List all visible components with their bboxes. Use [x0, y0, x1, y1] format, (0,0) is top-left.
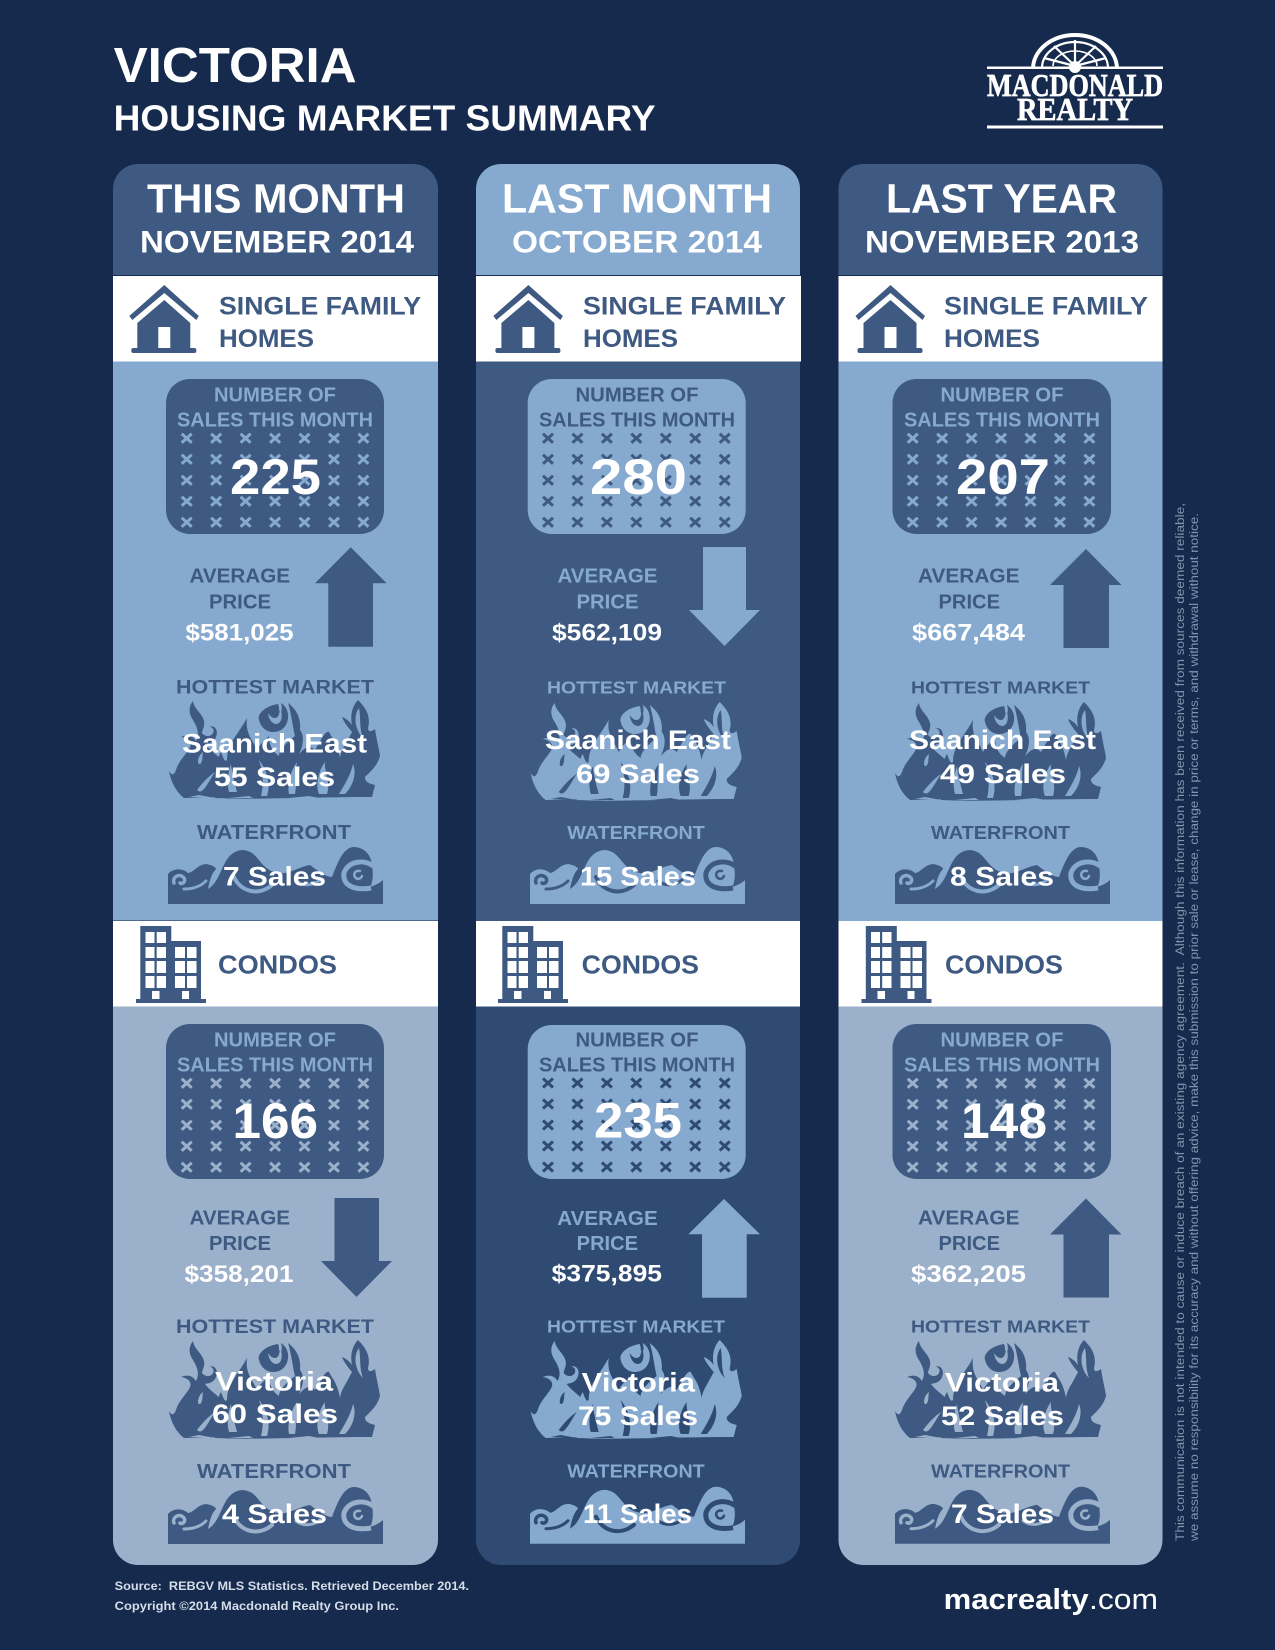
- sales box: SALES THIS MONTH: [177, 410, 373, 432]
- average price: PRICE: [209, 1233, 271, 1255]
- section: homes: [838, 362, 1162, 921]
- sales box: NUMBER OF: [940, 385, 1064, 407]
- section: homes: [476, 362, 800, 921]
- average price: AVERAGE: [918, 566, 1020, 588]
- average price: [911, 1208, 1026, 1288]
- hottest market: [169, 1316, 380, 1439]
- banner: condos: [838, 921, 1162, 1006]
- sales box: 280: [590, 449, 687, 505]
- waterfront: [895, 823, 1110, 904]
- website: macrealty: [944, 1584, 1089, 1616]
- sales box: NUMBER OF: [576, 1030, 698, 1052]
- hottest market: 75 Sales: [578, 1401, 698, 1431]
- waterfront: [530, 1462, 745, 1544]
- average price: [552, 1208, 662, 1288]
- waterfront: 4 Sales: [222, 1499, 327, 1529]
- sales box: SALES THIS MONTH: [539, 1055, 735, 1077]
- average price: PRICE: [938, 1233, 1000, 1255]
- banner: single family homes: HOMES: [944, 325, 1040, 353]
- banner: single family homes: SINGLE FAMILY: [583, 292, 786, 320]
- disclaimer: we assume no responsibility for its accuracy and without offering advice, make this submission to prior sale or lease, change in price or terms, and withdrawal without notice.: [1189, 513, 1201, 1542]
- average price: PRICE: [209, 591, 271, 613]
- hottest market: Saanich East: [182, 728, 367, 758]
- arrow down: [689, 547, 760, 646]
- sales box: 225: [230, 449, 321, 505]
- header: this month: NOVEMBER 2014: [140, 224, 414, 260]
- header: last year: LAST YEAR: [886, 176, 1117, 222]
- sales box: [166, 379, 384, 534]
- sales box: 235: [594, 1093, 682, 1149]
- sales box: NUMBER OF: [940, 1030, 1064, 1052]
- logo: Macdonald Realty: [987, 35, 1163, 128]
- sales box: 166: [232, 1093, 318, 1149]
- average price: $375,895: [552, 1261, 662, 1288]
- hottest market: HOTTEST MARKET: [911, 678, 1090, 698]
- banner: single family homes: [476, 276, 801, 362]
- hottest market: [531, 1316, 742, 1439]
- header: this month: [113, 164, 438, 275]
- title: [114, 39, 656, 138]
- header: last month: [476, 164, 800, 275]
- waterfront: 7 Sales: [223, 862, 326, 892]
- banner: condos: CONDOS: [582, 951, 699, 979]
- logo: Macdonald Realty: REALTY: [1017, 91, 1133, 127]
- header: this month: THIS MONTH: [147, 176, 405, 222]
- banner: single family homes: SINGLE FAMILY: [944, 292, 1148, 320]
- hottest market: 55 Sales: [214, 762, 335, 792]
- hottest market: HOTTEST MARKET: [911, 1316, 1090, 1336]
- average price: AVERAGE: [190, 566, 290, 588]
- arrow up: [1050, 549, 1122, 648]
- hottest market: HOTTEST MARKET: [176, 1316, 374, 1338]
- sales box: SALES THIS MONTH: [904, 410, 1100, 432]
- average price: AVERAGE: [918, 1208, 1020, 1230]
- header: last year: NOVEMBER 2013: [865, 224, 1139, 260]
- banner: condos: [476, 921, 800, 1006]
- hottest market: [895, 1316, 1106, 1439]
- disclaimer: [1175, 503, 1201, 1542]
- average price: [552, 566, 662, 647]
- sales box: [892, 379, 1111, 534]
- sales box: SALES THIS MONTH: [539, 410, 735, 432]
- section: condos: [113, 1006, 438, 1565]
- waterfront: WATERFRONT: [567, 823, 705, 843]
- sales box: NUMBER OF: [214, 1030, 336, 1052]
- banner: condos: CONDOS: [945, 951, 1063, 979]
- waterfront: 15 Sales: [580, 862, 696, 892]
- sales box: [528, 379, 746, 534]
- arrow down: [321, 1198, 392, 1297]
- header: last month: OCTOBER 2014: [512, 224, 763, 260]
- waterfront: 7 Sales: [951, 1499, 1054, 1529]
- title: VICTORIA: [114, 39, 357, 93]
- arrow up: [315, 547, 387, 647]
- hottest market: 69 Sales: [576, 759, 700, 789]
- banner: single family homes: HOMES: [583, 325, 678, 353]
- sales box: 207: [956, 449, 1050, 505]
- hottest market: [895, 678, 1106, 801]
- source note: Source: REBGV MLS Statistics. Retrieved December 2014.: [115, 1579, 469, 1593]
- waterfront: [895, 1462, 1110, 1544]
- source note: [115, 1579, 469, 1613]
- hottest market: Victoria: [582, 1368, 696, 1398]
- average price: AVERAGE: [190, 1208, 290, 1230]
- average price: AVERAGE: [557, 1208, 658, 1230]
- average price: $667,484: [912, 620, 1026, 647]
- average price: [912, 566, 1026, 647]
- sales box: [166, 1024, 384, 1179]
- panel: last month: [476, 164, 801, 1565]
- panel: this month: [113, 164, 438, 1565]
- section: condos: [476, 1006, 800, 1565]
- waterfront: WATERFRONT: [931, 1462, 1070, 1482]
- sales box: SALES THIS MONTH: [904, 1055, 1100, 1077]
- waterfront: 8 Sales: [950, 862, 1054, 892]
- banner: single family homes: [113, 276, 438, 362]
- website: .com: [1089, 1584, 1158, 1616]
- hottest market: [531, 678, 742, 801]
- average price: $358,201: [184, 1261, 294, 1288]
- hottest market: [169, 676, 380, 799]
- average price: PRICE: [576, 591, 638, 613]
- hottest market: 49 Sales: [940, 759, 1066, 789]
- waterfront: WATERFRONT: [197, 822, 351, 844]
- sales box: [892, 1024, 1111, 1179]
- arrow up: [688, 1199, 760, 1298]
- waterfront: [168, 1461, 383, 1544]
- hottest market: Saanich East: [545, 725, 731, 755]
- hottest market: 60 Sales: [212, 1399, 338, 1429]
- waterfront: WATERFRONT: [197, 1461, 351, 1483]
- section: homes: [113, 362, 438, 920]
- website: [944, 1584, 1158, 1616]
- waterfront: [530, 823, 745, 904]
- waterfront: WATERFRONT: [567, 1462, 705, 1482]
- sales box: NUMBER OF: [576, 385, 698, 407]
- sales box: SALES THIS MONTH: [177, 1055, 373, 1077]
- waterfront: WATERFRONT: [931, 823, 1070, 843]
- sales box: NUMBER OF: [214, 385, 336, 407]
- average price: $581,025: [186, 620, 294, 647]
- hottest market: Saanich East: [909, 725, 1096, 755]
- hottest market: HOTTEST MARKET: [547, 678, 726, 698]
- section: condos: [838, 1006, 1162, 1565]
- average price: [186, 566, 294, 647]
- logo: Macdonald Realty: MACDONALD: [987, 67, 1163, 103]
- hottest market: HOTTEST MARKET: [176, 676, 374, 698]
- average price: AVERAGE: [558, 566, 658, 588]
- average price: PRICE: [938, 591, 1000, 613]
- hottest market: HOTTEST MARKET: [547, 1316, 725, 1336]
- average price: [184, 1208, 294, 1288]
- waterfront: 11 Sales: [583, 1499, 692, 1529]
- sales box: [528, 1025, 746, 1179]
- average price: PRICE: [577, 1233, 638, 1255]
- panel: last year: [838, 164, 1162, 1565]
- source note: Copyright ©2014 Macdonald Realty Group Inc.: [115, 1599, 399, 1613]
- banner: single family homes: HOMES: [219, 325, 314, 353]
- arrow up: [1050, 1198, 1122, 1298]
- waterfront: [168, 822, 383, 904]
- average price: $362,205: [911, 1261, 1026, 1288]
- banner: single family homes: SINGLE FAMILY: [219, 292, 421, 320]
- hottest market: Victoria: [215, 1367, 334, 1397]
- hottest market: Victoria: [945, 1368, 1060, 1398]
- banner: single family homes: [838, 276, 1162, 362]
- sales box: 148: [961, 1093, 1047, 1149]
- average price: $562,109: [552, 620, 662, 647]
- hottest market: 52 Sales: [941, 1401, 1064, 1431]
- header: last month: LAST MONTH: [502, 176, 772, 222]
- title: HOUSING MARKET SUMMARY: [114, 98, 656, 138]
- header: last year: [838, 164, 1162, 275]
- banner: condos: CONDOS: [218, 951, 337, 979]
- disclaimer: This communication is not intended to cause or induce breach of an existing agency agreement. Although this information has been received from sources deemed reliable,: [1175, 503, 1187, 1541]
- banner: condos: [113, 921, 438, 1006]
